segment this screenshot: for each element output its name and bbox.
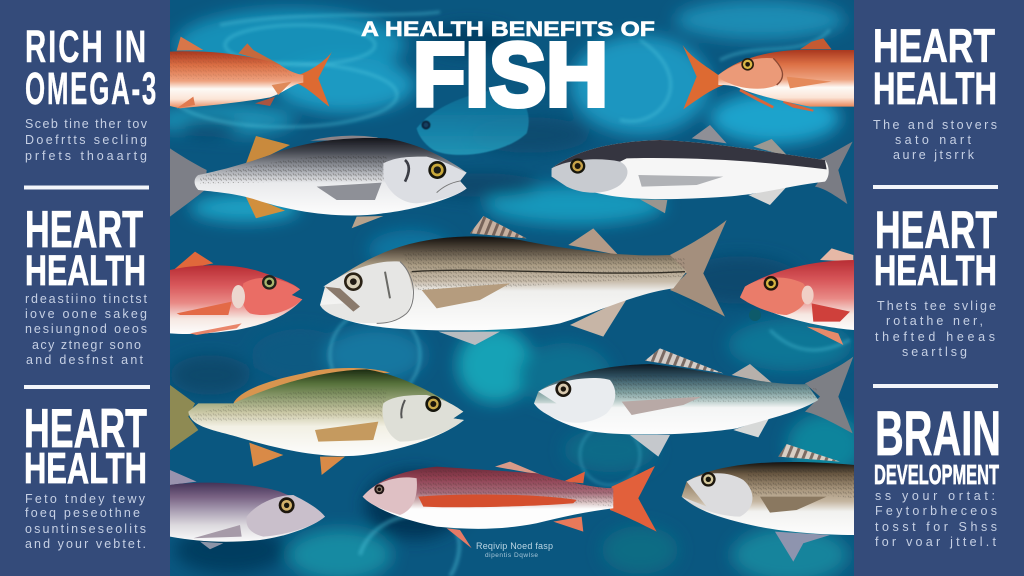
fish: top-right red fish bbox=[683, 38, 855, 111]
title bbox=[361, 17, 655, 126]
text block: middle heart description: thefted heeas bbox=[875, 330, 995, 344]
text block: second heart health description: Feto tndey tewy bbox=[25, 492, 146, 506]
text block: heart health description: nesiungnod oeos bbox=[25, 322, 147, 336]
text block: top heart description bbox=[873, 118, 997, 162]
small caption: dipentis Dqwlse bbox=[485, 552, 538, 559]
text block: heart health description: and desfnst ant bbox=[26, 353, 144, 367]
water background bbox=[155, 0, 863, 576]
text block: middle heart description: Thets tee svlige bbox=[877, 299, 996, 313]
text block: heart health description: rdeastiino tinctst bbox=[25, 292, 148, 306]
fish: top-left red fish bbox=[170, 37, 332, 108]
background blue fish bbox=[417, 88, 529, 155]
text block: brain development description: for voar jttel.t bbox=[875, 535, 997, 549]
small caption bbox=[476, 541, 553, 559]
heading: Heart Health: HEART bbox=[25, 201, 143, 259]
text block: omega-3 description: Sceb tine ther tov bbox=[25, 117, 148, 131]
text block: second heart health description: foeq peseothne bbox=[25, 506, 140, 520]
heading: Brain Development bbox=[874, 399, 1001, 490]
text block: second heart health description: and your vebtet. bbox=[25, 537, 146, 551]
fish: upper-left silver fish bbox=[170, 136, 467, 228]
fish: lower-right teal fish bbox=[534, 348, 853, 457]
panel: left column bbox=[0, 0, 170, 576]
heading: Heart Health second bbox=[24, 397, 147, 493]
text block: brain development description: tosst for Shss bbox=[875, 520, 997, 534]
text block: second heart health description: osuntinseseolits bbox=[25, 522, 146, 536]
fish: bottom-center red-striped fish bbox=[363, 462, 657, 548]
text block: omega-3 description: prfets thoaartg bbox=[25, 149, 147, 163]
text block: heart health description bbox=[25, 292, 148, 367]
text block: brain development description: Feytorbheceos bbox=[875, 504, 997, 518]
title word: Fish: FISH bbox=[413, 26, 608, 126]
fish: mid-left red fish bbox=[170, 252, 302, 335]
text block: second heart health description bbox=[25, 492, 146, 551]
fish: bottom-right bronze fish bbox=[682, 444, 855, 562]
text block: brain development description: ss your ortat: bbox=[875, 489, 995, 503]
heading: Rich in Omega-3: RICH IN bbox=[25, 21, 148, 72]
heading: Rich in Omega-3 bbox=[25, 21, 158, 114]
heading: Heart Health bbox=[25, 201, 146, 295]
heading: Rich in Omega-3: OMEGA-3 bbox=[25, 63, 158, 114]
heading: Heart Health top bbox=[873, 19, 997, 114]
title line: A Health Benefits of: A HEALTH BENEFITS OF bbox=[361, 17, 655, 41]
text block: top heart description: The and stovers bbox=[873, 118, 997, 132]
heading: Heart Health second: HEALTH bbox=[24, 444, 147, 493]
text block: brain development description bbox=[875, 489, 997, 549]
text block: top heart description: aure jtsrrk bbox=[893, 148, 975, 162]
fish: bottom-left purple fish bbox=[170, 470, 325, 549]
text block: heart health description: acy ztnegr sono bbox=[32, 338, 141, 352]
text block: omega-3 description bbox=[25, 117, 148, 163]
fish: upper-right dark silver fish bbox=[552, 125, 853, 213]
panel: right column bbox=[854, 0, 1024, 576]
text block: top heart description: sato nart bbox=[895, 133, 972, 147]
heading: Heart Health second: HEART bbox=[24, 397, 147, 459]
heading: Heart Health middle bbox=[874, 201, 997, 295]
text block: heart health description: iove oone sakeg bbox=[25, 307, 147, 321]
text block: middle heart description bbox=[875, 299, 996, 359]
text block: middle heart description: seartlsg bbox=[902, 345, 967, 359]
fish: center large fish bbox=[320, 216, 727, 345]
fish: mid-right red fish bbox=[740, 248, 855, 345]
text block: omega-3 description: Doefrtts secling bbox=[25, 133, 147, 147]
small caption: Reqivip Noed fasp bbox=[476, 541, 553, 551]
heading: Heart Health: HEALTH bbox=[25, 247, 146, 295]
fish: lower-left green fish bbox=[170, 368, 464, 475]
text block: middle heart description: rotathe ner, bbox=[886, 314, 983, 328]
